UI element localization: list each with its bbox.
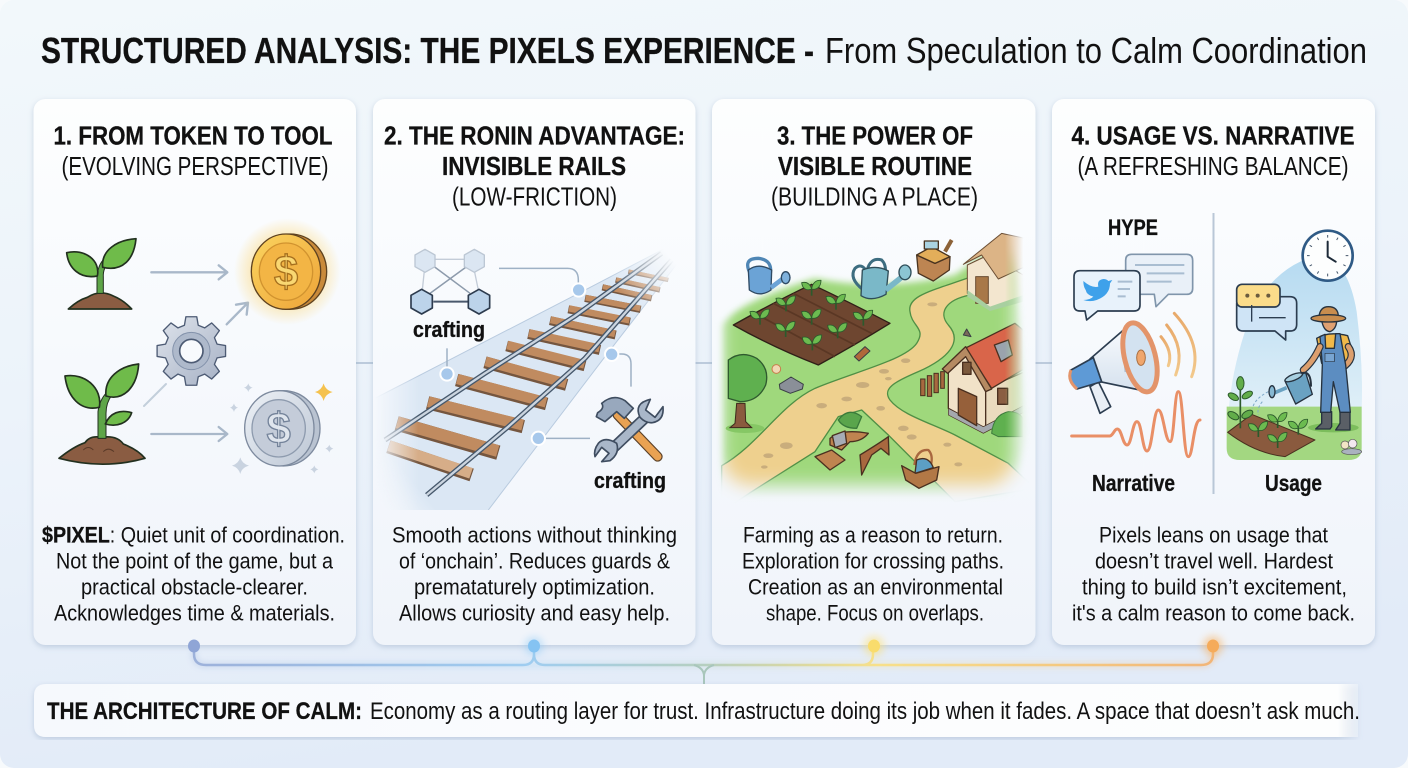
title: STRUCTURED ANALYSIS: THE PIXELS EXPERIENCE - — [41, 30, 814, 71]
farm plot — [733, 280, 890, 365]
icon: large sprout — [59, 364, 145, 464]
icon: gold coin — [234, 218, 341, 325]
text: usage description: thing to build isn’t excitement, — [1082, 574, 1347, 600]
connectors between panels — [356, 362, 1052, 364]
icon: basket — [902, 450, 939, 488]
icon: crossed hammer and wrench — [595, 398, 663, 462]
text: ronin description: premataturely optimization. — [414, 574, 655, 600]
icon: social speech bubble — [1074, 271, 1140, 320]
panel: the power of visible routine — [712, 99, 1036, 645]
text: pixel description: $PIXEL: Quiet unit of coordination. — [42, 522, 345, 548]
icon: small sprout — [67, 239, 136, 309]
chart: narrative waveform — [1072, 392, 1200, 457]
heading: the ronin advantage: INVISIBLE RAILS — [442, 151, 626, 181]
text: ronin description — [392, 522, 677, 626]
icon: far cottage — [963, 233, 1025, 311]
heading: the ronin advantage — [384, 120, 685, 212]
text: routine description: Farming as a reason to return. — [743, 522, 1003, 548]
icon: plants — [1226, 377, 1308, 448]
icon: blue watering can — [748, 258, 790, 294]
bottom bar: the architecture of calm — [34, 684, 1360, 737]
connector tree to bottom bar — [188, 636, 1223, 685]
text: routine description — [742, 522, 1004, 626]
usage scene background — [1227, 255, 1362, 460]
grass — [1227, 407, 1362, 460]
heading: the power of visible routine — [771, 120, 978, 212]
icon: tree — [726, 355, 767, 433]
buildings with right edge fade — [942, 233, 1025, 437]
label: crafting bottom: crafting — [594, 468, 666, 493]
icon: sound waves — [1161, 313, 1195, 377]
small props — [772, 329, 971, 393]
icon: clock — [1303, 231, 1353, 281]
icon: farmhouse — [942, 323, 1025, 433]
green ground — [722, 232, 1028, 498]
icon: gear — [157, 317, 226, 385]
heading: from token to tool: 1. FROM TOKEN TO TOOL — [54, 120, 333, 150]
label: crafting top: crafting — [413, 317, 485, 342]
dirt path — [721, 278, 1022, 496]
label: narrative: Narrative — [1092, 470, 1175, 496]
railway track — [375, 248, 680, 510]
heading: the ronin advantage: 2. THE RONIN ADVANTAGE: — [384, 120, 685, 150]
panel: usage vs narrative — [1052, 99, 1375, 645]
heading: from token to tool: (EVOLVING PERSPECTIVE) — [62, 151, 328, 181]
icon: farmer — [1303, 307, 1359, 432]
text: usage description: Pixels leans on usage that — [1099, 522, 1328, 548]
divider line — [1212, 213, 1214, 494]
text: pixel description — [42, 522, 345, 626]
faded ground and path — [718, 254, 1026, 499]
text: routine description: Creation as an environmental — [748, 574, 1003, 600]
heading: the ronin advantage: (LOW-FRICTION) — [452, 182, 617, 212]
icon: teal watering can — [853, 259, 911, 299]
panel: the ronin advantage — [373, 99, 696, 645]
text: pixel description: Not the point of the game, but a — [56, 548, 334, 574]
text: routine description: shape. Focus on overlaps. — [766, 600, 984, 626]
icon: gold coin: $ — [274, 249, 298, 297]
text: usage description — [1072, 522, 1355, 626]
illustration: railway with network and tools — [375, 248, 680, 510]
text: ronin description: Allows curiosity and easy help. — [399, 600, 670, 626]
icon: fence — [921, 372, 944, 396]
heading: the power of visible routine: 3. THE POWER OF — [777, 120, 973, 150]
text: routine description: Exploration for crossing paths. — [742, 548, 1004, 574]
heading: the power of visible routine: (BUILDING A PLACE) — [771, 182, 978, 212]
icon: back speech bubble — [1126, 254, 1193, 307]
connector dots — [188, 636, 1223, 656]
illustration: farm village map — [722, 232, 1035, 512]
icon: hillock tools — [815, 412, 889, 475]
bush — [992, 412, 1025, 437]
arrows — [144, 265, 248, 441]
icon: silver coin — [245, 391, 320, 466]
heading: usage vs narrative — [1072, 120, 1354, 181]
water droplets — [1252, 392, 1268, 415]
illustration: sprouts, gear and coins — [59, 218, 341, 474]
icon: megaphone — [1070, 319, 1163, 413]
text: usage description: doesn’t travel well. Hardest — [1095, 548, 1333, 574]
icon: crate — [917, 240, 952, 281]
text: pixel description: practical obstacle-clearer. — [81, 574, 308, 600]
panel: from token to tool — [34, 99, 356, 645]
icon: network of blocks — [411, 249, 490, 314]
path stones — [761, 302, 962, 469]
illustration: hype versus usage — [1070, 231, 1362, 460]
heading: usage vs narrative: (A REFRESHING BALANCE) — [1078, 151, 1348, 181]
soil plot — [1228, 414, 1315, 457]
text: ronin description: Smooth actions without thinking — [392, 522, 677, 548]
heading: usage vs narrative: 4. USAGE VS. NARRATIVE — [1072, 120, 1354, 150]
bottom bar: the architecture of calm: THE ARCHITECTURE OF CALM: — [47, 698, 362, 725]
icon: flowers and stones — [1341, 439, 1362, 455]
heading: the power of visible routine: VISIBLE ROUTINE — [778, 151, 972, 181]
callout lines and dots — [440, 268, 631, 445]
icon: sparkles — [230, 383, 333, 474]
text: ronin description: of ‘onchain’. Reduces guards & — [399, 548, 670, 574]
label: usage: Usage — [1265, 470, 1322, 496]
icon: chat bubbles — [1237, 284, 1297, 340]
text: pixel description: Acknowledges time & materials. — [54, 600, 335, 626]
label: hype: HYPE — [1108, 215, 1158, 240]
icon: watering can — [1269, 371, 1312, 404]
heading: from token to tool — [54, 120, 333, 181]
icon: silver coin: $ — [267, 405, 291, 453]
text: usage description: it's a calm reason to come back. — [1072, 600, 1355, 626]
